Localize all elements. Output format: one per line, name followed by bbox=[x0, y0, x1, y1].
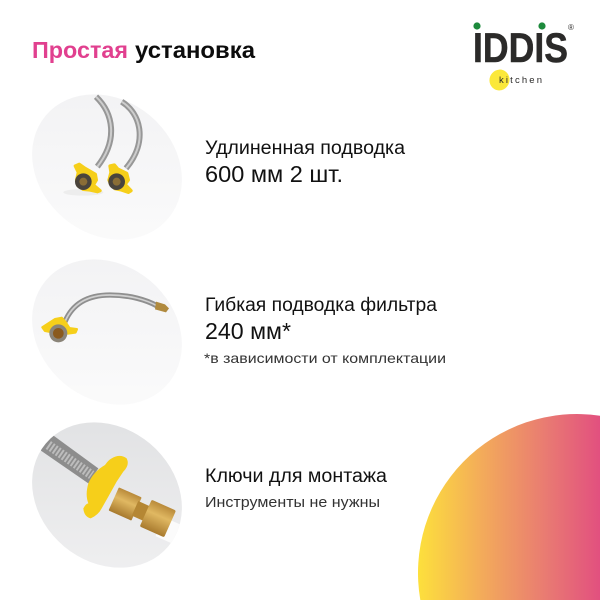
title: установка bbox=[135, 37, 255, 63]
text: wrenches: Инструменты не нужны bbox=[205, 494, 380, 511]
text: flexible filter hose: 240 мм* bbox=[205, 318, 291, 344]
photo 3: wrench and brass fitting close-up bbox=[32, 422, 182, 568]
text: flexible filter hose bbox=[204, 295, 446, 366]
text: wrenches: Ключи для монтажа bbox=[205, 466, 387, 487]
logo: IDDIS kitchen: ® bbox=[568, 23, 574, 32]
text: extended hose: Удлиненная подводка bbox=[205, 138, 405, 159]
photo 2: flexible filter hose bbox=[3, 229, 211, 435]
text: extended hose: 600 мм 2 шт. bbox=[205, 161, 343, 187]
logo: IDDIS kitchen: IDDIS bbox=[473, 24, 568, 71]
title: Простая bbox=[32, 37, 128, 63]
photo 1: two hoses with yellow wings bbox=[3, 64, 211, 270]
text: flexible filter hose: *в зависимости от комплектации bbox=[204, 350, 446, 366]
text: extended hose bbox=[205, 138, 405, 187]
text: wrenches bbox=[205, 466, 387, 511]
title bbox=[32, 37, 255, 63]
logo: IDDIS kitchen bbox=[473, 22, 574, 93]
text: flexible filter hose: Гибкая подводка фильтра bbox=[205, 295, 437, 316]
decorative gradient circle bbox=[418, 414, 600, 600]
logo: IDDIS kitchen: kitchen bbox=[499, 75, 542, 86]
